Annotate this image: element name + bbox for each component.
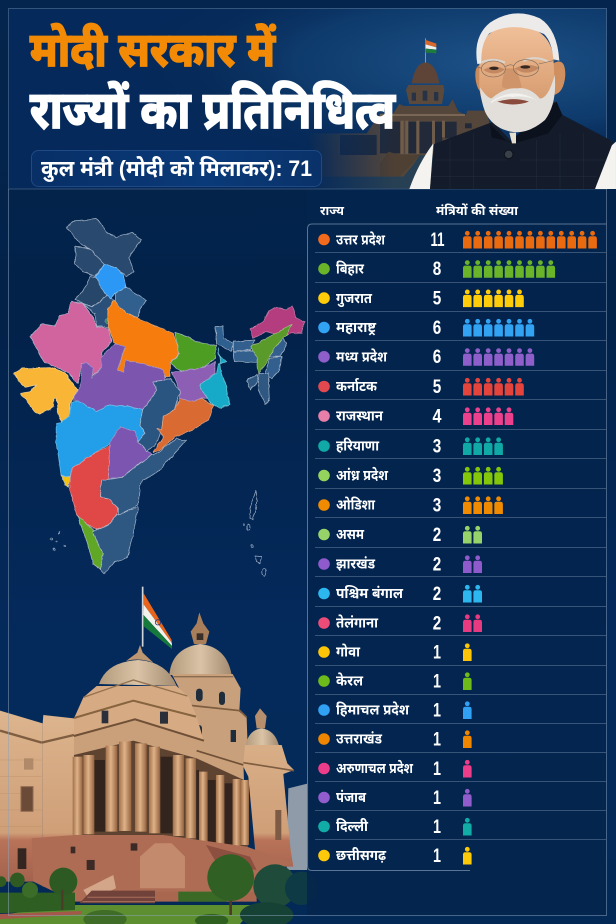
cornice	[74, 719, 244, 780]
row: Arunachal Pradesh: अरुणाचल प्रदेश	[336, 759, 414, 777]
state: Gujarat	[14, 368, 78, 423]
right dome	[169, 644, 232, 675]
row: Assam: 2	[433, 525, 441, 546]
row: Andhra Pradesh: आंध्र प्रदेश	[336, 466, 389, 484]
podium	[32, 835, 293, 902]
left wing	[0, 711, 43, 882]
state: Manipur	[265, 357, 282, 378]
hedges	[0, 893, 75, 913]
row: Maharashtra	[318, 318, 534, 339]
state: Nagaland	[270, 338, 287, 357]
row: Chhattisgarh	[318, 846, 472, 867]
row: Uttarakhand: 1	[433, 730, 441, 750]
state: Arunachal Pradesh	[250, 306, 304, 338]
state: Maharashtra	[57, 402, 145, 477]
row: Jharkhand: झारखंड	[336, 556, 376, 572]
state: Goa	[61, 475, 70, 487]
map of India	[14, 219, 304, 576]
row: Jharkhand	[318, 554, 482, 576]
jacket	[430, 102, 613, 189]
state: Ladakh side	[75, 247, 105, 276]
far wing	[287, 783, 308, 870]
pill: total ministers	[32, 150, 322, 186]
row: Telangana	[318, 614, 482, 634]
row: Chhattisgarh: छत्तीसगढ़	[336, 847, 386, 864]
state: Kerala	[77, 515, 103, 570]
row: Bihar	[318, 259, 555, 280]
portico interior	[74, 739, 248, 850]
row: West Bengal: 2	[433, 584, 441, 605]
state: Jammu Kashmir	[67, 219, 141, 276]
state: Jharkhand	[172, 362, 215, 402]
dome main	[99, 660, 177, 686]
state: Himachal Pradesh	[96, 264, 126, 298]
row: Uttar Pradesh: उत्तर प्रदेश	[336, 230, 386, 248]
row: Haryana: 3	[433, 436, 441, 458]
title: line 2: राज्यों का प्रतिनिधित्व	[30, 81, 396, 140]
row: Assam	[318, 525, 482, 546]
row: Kerala: 1	[433, 672, 441, 692]
table header	[320, 203, 519, 218]
row: Punjab: पंजाब	[336, 789, 367, 806]
row: Delhi: दिल्ली	[336, 818, 369, 835]
row: Maharashtra: 6	[433, 318, 441, 339]
row: Kerala: केरल	[336, 672, 363, 690]
hair	[476, 13, 559, 64]
state: Tamil Nadu	[93, 507, 138, 574]
frame lines	[8, 189, 10, 915]
trees	[227, 893, 235, 915]
row: Goa: 1	[433, 642, 441, 664]
lawn	[0, 905, 257, 924]
row: Himachal Pradesh: 1	[433, 700, 441, 722]
row: Bihar: बिहार	[336, 260, 365, 278]
row: Odisha: ओडिशा	[336, 496, 376, 514]
small dome	[246, 728, 279, 746]
state: West Bengal	[200, 348, 230, 408]
panel: header band	[8, 8, 607, 189]
ears	[553, 62, 565, 95]
row: Maharashtra: महाराष्ट्र	[336, 320, 377, 336]
state: Andhra Pradesh	[100, 438, 187, 515]
state: Haryana	[83, 295, 114, 327]
islands: Andaman and Nicobar	[243, 491, 266, 576]
row: Karnataka	[318, 377, 524, 398]
second bay	[43, 715, 77, 887]
row: Telangana: तेलंगाना	[336, 614, 379, 632]
table header: मंत्रियों की संख्या	[436, 203, 519, 218]
kurta	[409, 142, 616, 189]
row: Telangana: 2	[433, 614, 441, 634]
eyebrows and glasses	[482, 58, 548, 63]
row: Madhya Pradesh	[318, 347, 534, 368]
state: Karnataka	[70, 445, 118, 530]
right tower	[243, 745, 294, 867]
row: Assam: असम	[336, 527, 364, 543]
row: Punjab: 1	[433, 788, 441, 809]
row: Rajasthan: राजस्थान	[336, 408, 384, 424]
building: lower left with flag	[0, 587, 318, 924]
columns	[73, 742, 249, 846]
face	[479, 25, 555, 126]
row: Delhi	[318, 817, 472, 838]
table header: राज्य	[320, 203, 345, 218]
row: Andhra Pradesh: 3	[433, 466, 441, 487]
row: Haryana: हरियाणा	[336, 438, 380, 454]
row: Gujarat: गुजरात	[336, 291, 373, 308]
state: Chhattisgarh	[138, 378, 180, 452]
row: Uttarakhand: उत्तराखंड	[336, 730, 383, 748]
row: Gujarat: 5	[433, 288, 442, 310]
flag	[143, 587, 172, 649]
portrait: Modi	[409, 13, 616, 189]
row: Gujarat	[318, 288, 524, 310]
pill: total ministers: कुल मंत्री (मोदी को मिलाकर): 71	[41, 156, 312, 182]
row: Himachal Pradesh	[318, 700, 472, 722]
row: Rajasthan: 4	[432, 406, 442, 428]
row: Kerala	[318, 672, 472, 692]
state: Bihar	[170, 332, 217, 372]
state: Mizoram	[258, 373, 269, 404]
row: Punjab	[318, 788, 472, 809]
row: Jharkhand: 2	[433, 554, 441, 576]
header building with flag	[303, 38, 493, 188]
row: Uttar Pradesh	[318, 230, 597, 251]
row: Haryana	[318, 436, 503, 458]
row: Uttarakhand	[318, 730, 472, 750]
row: Chhattisgarh: 1	[433, 846, 441, 867]
beard	[480, 75, 555, 132]
row: Karnataka: कर्नाटक	[336, 378, 378, 395]
row: Karnataka: 5	[433, 377, 442, 398]
row: West Bengal: पश्चिम बंगाल	[336, 585, 403, 602]
state: Rajasthan	[30, 302, 112, 383]
row: Goa	[318, 642, 472, 664]
attic	[74, 686, 204, 742]
state: Meghalaya	[233, 340, 255, 352]
row: Uttar Pradesh: 11	[430, 230, 445, 251]
panel: state table	[8, 189, 607, 916]
state: Delhi	[105, 319, 110, 323]
row: Bihar: 8	[433, 259, 441, 280]
row: Andhra Pradesh	[318, 466, 503, 487]
state: Telangana	[108, 427, 152, 478]
row: Madhya Pradesh: 6	[433, 347, 441, 368]
state: Tripura	[247, 373, 258, 390]
row: Arunachal Pradesh: 1	[433, 759, 441, 780]
state: Assam	[251, 324, 292, 373]
row: Goa: गोवा	[336, 644, 361, 660]
row: Himachal Pradesh: हिमाचल प्रदेश	[336, 700, 410, 718]
state: Meghalaya south	[233, 350, 262, 362]
row: Arunachal Pradesh	[318, 759, 472, 780]
state: Punjab	[75, 276, 107, 307]
islands: Lakshadweep	[51, 532, 66, 551]
row: Rajasthan	[318, 406, 513, 428]
row: Odisha	[318, 496, 503, 516]
title: line 1: मोदी सरकार में	[30, 23, 276, 76]
state: Odisha	[153, 398, 213, 453]
row separators	[315, 252, 606, 840]
state: Sikkim	[215, 326, 233, 352]
row: Madhya Pradesh: मध्य प्रदेश	[336, 348, 388, 366]
state: Uttarakhand	[115, 287, 147, 318]
state: Uttar Pradesh	[108, 300, 179, 378]
row: Odisha: 3	[433, 496, 441, 516]
row: West Bengal	[318, 584, 482, 605]
row: Delhi: 1	[433, 817, 441, 838]
state: Madhya Pradesh	[73, 343, 165, 412]
